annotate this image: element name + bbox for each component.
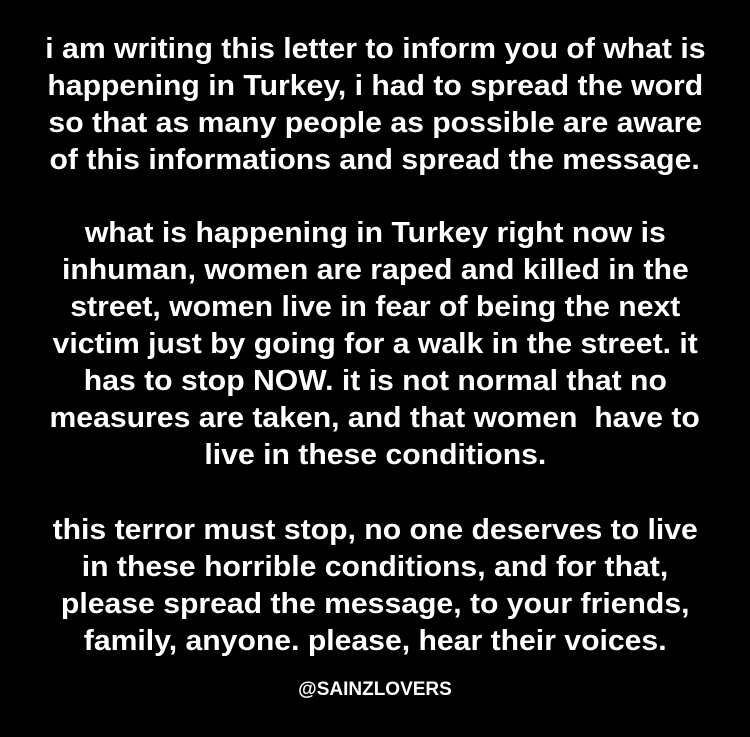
paragraph 1 [45, 33, 705, 176]
handle: @SAINZLOVERS [298, 679, 452, 700]
paragraph 3: in these horrible conditions, and for that, [82, 551, 668, 583]
paragraph 2: has to stop NOW. it is not normal that no [83, 365, 667, 397]
paragraph 3: please spread the message, to your friends, [61, 588, 689, 620]
paragraph 3: this terror must stop, no one deserves to live [52, 514, 698, 546]
paragraph 1: of this informations and spread the message. [50, 144, 700, 176]
paragraph 3: family, anyone. please, hear their voices. [84, 625, 666, 657]
paragraph 1: so that as many people as possible are aware [48, 107, 702, 139]
paragraph 2: live in these conditions. [204, 439, 546, 471]
paragraph 3 [52, 514, 698, 657]
paragraph 2: measures are taken, and that women have to [50, 402, 700, 434]
paragraph 2: street, women live in fear of being the next [70, 291, 680, 323]
paragraph 2: victim just by going for a walk in the street. it [52, 328, 698, 360]
paragraph 2: inhuman, women are raped and killed in the [62, 254, 688, 286]
paragraph 2 [50, 217, 700, 471]
paragraph 2: what is happening in Turkey right now is [85, 217, 665, 249]
paragraph 1: i am writing this letter to inform you of what is [45, 33, 705, 65]
paragraph 1: happening in Turkey, i had to spread the word [47, 70, 703, 102]
